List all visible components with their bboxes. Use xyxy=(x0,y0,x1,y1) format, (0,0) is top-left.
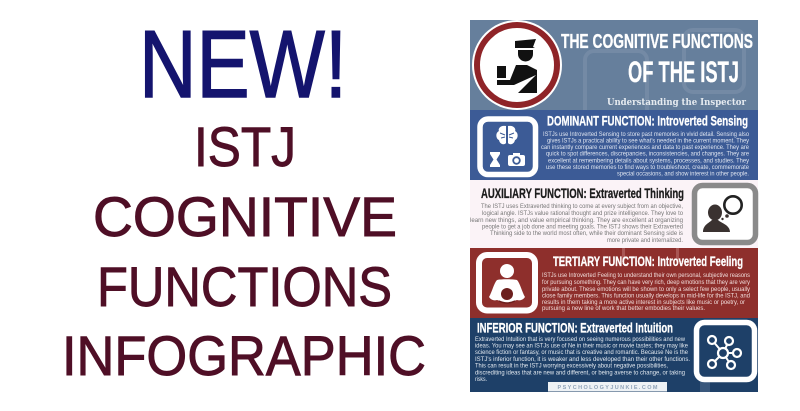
text block: learn new things, and value empirical thinking. They are excellent at organizing xyxy=(470,218,683,224)
text block: pursuing a new line of work that better embodies their values. xyxy=(542,306,705,312)
panel: inferior function xyxy=(470,318,758,392)
text block: This can result in the ISTJ worrying excessively about negative possibilities, xyxy=(475,364,668,370)
text block: use these stored memories to find ways to troubleshoot, create, commemorate xyxy=(546,165,750,171)
text block: The ISTJ uses Extraverted thinking to come at every subject from an objective, xyxy=(481,204,683,210)
heading: FUNCTIONS: FUNCTIONS xyxy=(97,255,392,318)
tagline: Understanding the Inspector xyxy=(607,98,746,108)
text block: special occasions, and show interest in other people. xyxy=(617,172,749,178)
icon: network nodes xyxy=(696,322,754,380)
text block xyxy=(541,132,750,178)
panel: tertiary function xyxy=(470,248,758,318)
text block: ideas. You may see an ISTJs use of Ne in their music or movie tastes; they may like xyxy=(475,344,689,350)
text block: science fiction or fantasy, or music that is creative and romantic. Because Ne is the xyxy=(475,350,689,356)
footer: website strip: PSYCHOLOGYJUNKIE.COM xyxy=(558,385,658,391)
text block: can instantly compare current experiences and data to past experience. They are xyxy=(541,145,750,151)
heading: ISTJ: ISTJ xyxy=(194,115,296,178)
icon: person holding heart xyxy=(479,255,535,310)
icon: brain, hourglass and camera xyxy=(480,119,536,174)
panel: auxiliary function xyxy=(470,180,758,248)
left headline block xyxy=(62,11,426,387)
heading: INFERIOR FUNCTION: Extraverted Intuition xyxy=(477,320,673,336)
text block: more private and internalized. xyxy=(607,238,683,244)
text block: people to get a job done and meeting goals. The ISTJ shows their Extraverted xyxy=(482,224,683,230)
heading: COGNITIVE: COGNITIVE xyxy=(93,185,397,248)
text block: discrediting ideas that are new and different, or being averse to change, or taking xyxy=(475,370,685,376)
text block xyxy=(542,273,750,312)
text block: ISTJs use Introverted Sensing to store past memories in vivid detail. Sensing also xyxy=(543,132,750,138)
panel: infographic header xyxy=(470,20,758,121)
text block: private about. These emotions will be shown to only a select few people, usually xyxy=(542,287,750,293)
footer: website strip xyxy=(548,382,667,392)
heading: NEW!: NEW! xyxy=(139,11,347,118)
text block: Extraverted Intuition that is very focused on seeing numerous possibilities and new xyxy=(475,337,686,343)
icon: inspector badge xyxy=(472,20,562,110)
panel: dominant function xyxy=(470,110,758,180)
text block xyxy=(475,337,690,383)
text block: ISTJ's inferior function, it is weaker and less developed than their other functions. xyxy=(475,357,690,363)
icon: person with thought bubble xyxy=(694,186,756,242)
text block: gives ISTJs a practical ability to see what's needed in the current moment. They xyxy=(547,138,749,144)
text block: close family members. This function usually develops in mid-life for the ISTJ, and xyxy=(542,294,750,300)
text block xyxy=(470,204,684,244)
text block: Thinking side to the world most often, while their dominant Sensing side is xyxy=(490,231,683,237)
text block: quick to spot differences, discrepancies, inconsistencies, and changes. They are xyxy=(546,152,750,158)
text block: results in them taking a more active interest in subjects like music or poetry, or xyxy=(542,300,745,306)
text block: logical angle. ISTJs value rational thought and prize intelligence. They love to xyxy=(482,211,684,217)
text block: ISTJs use Introverted Feeling to understand their own personal, subjective reasons xyxy=(542,273,750,279)
heading: INFOGRAPHIC: INFOGRAPHIC xyxy=(62,324,426,387)
text block: excellent at remembering details about systems, processes, and studies. They xyxy=(548,158,749,164)
text block: for pursuing something. They can have very rich, deep emotions that they are very xyxy=(542,280,750,286)
text block: risks. xyxy=(475,377,487,383)
heading: AUXILIARY FUNCTION: Extraverted Thinking xyxy=(481,186,684,201)
